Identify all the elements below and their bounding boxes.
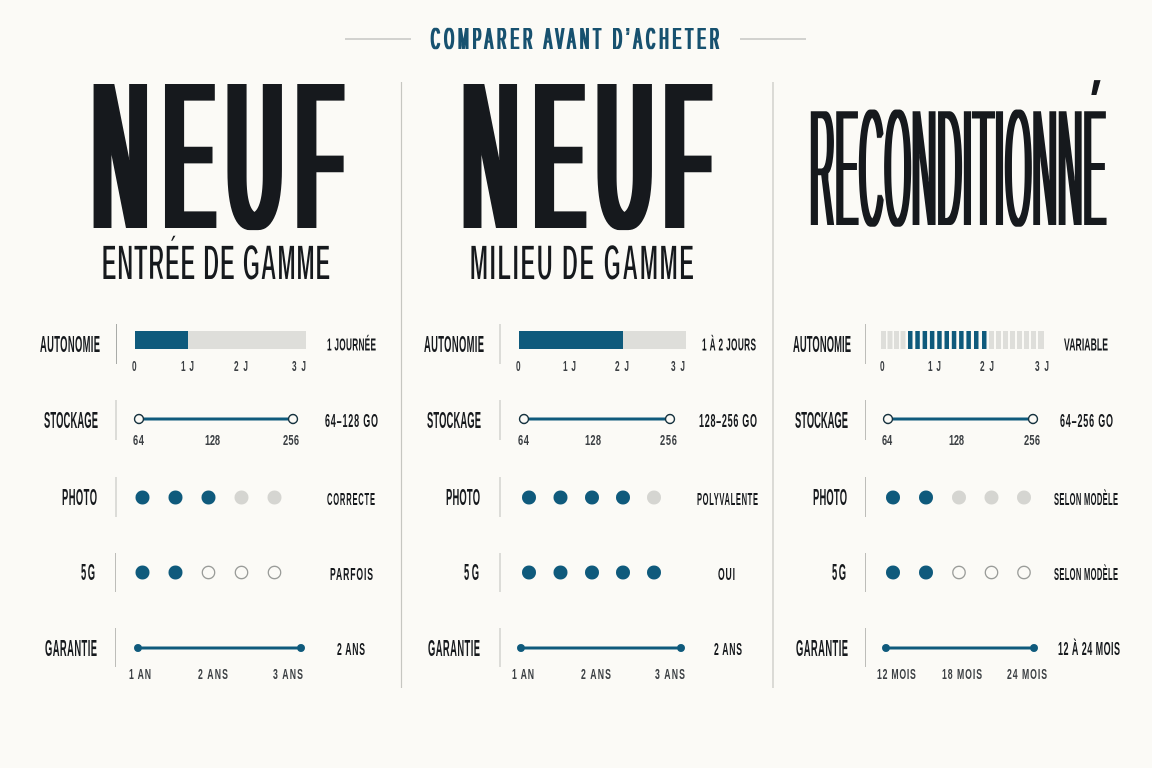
row: stockage	[427, 400, 757, 449]
row: 5G: SELON MODÈLE	[1054, 563, 1118, 584]
row: garantie: 1 AN	[512, 666, 534, 683]
row: autonomie: AUTONOMIE	[40, 331, 100, 357]
title: COMPARER AVANT D’ACHETER	[431, 21, 719, 56]
row: garantie: 3 ANS	[273, 666, 303, 683]
row: stockage: 256	[1024, 432, 1040, 449]
row: stockage: 64	[518, 432, 529, 449]
row: garantie	[796, 628, 1120, 683]
row: autonomie: 1 J	[181, 357, 194, 375]
row: photo: PHOTO	[446, 484, 480, 510]
row: autonomie: 3 J	[671, 357, 685, 375]
row: photo: PHOTO	[813, 484, 847, 510]
row: stockage	[795, 400, 1113, 449]
row: garantie: 18 MOIS	[942, 666, 982, 683]
row: autonomie: VARIABLE	[1064, 334, 1108, 354]
row: autonomie: 0	[516, 357, 521, 375]
row: 5G: 5G	[832, 559, 846, 585]
row: autonomie: 1 JOURNÉE	[327, 334, 376, 354]
row: autonomie: 2 J	[615, 357, 629, 375]
panel: neuf milieu de gamme	[424, 33, 758, 683]
row: stockage: 64–256 GO	[1060, 412, 1113, 432]
row: garantie: 2 ANS	[337, 638, 365, 659]
row: garantie: GARANTIE	[796, 635, 848, 661]
row: 5G: OUI	[718, 563, 735, 584]
row: photo: PHOTO	[62, 484, 97, 510]
subheading: entrée de gamme: ENTRÉE DE GAMME	[102, 234, 330, 292]
row: photo: POLYVALENTE	[697, 489, 758, 509]
row: 5G	[81, 553, 373, 592]
row: stockage: 64	[882, 432, 892, 449]
row: stockage: STOCKAGE	[427, 407, 481, 433]
row: garantie: GARANTIE	[428, 635, 480, 661]
row: 5G	[464, 553, 735, 592]
subheading: milieu de gamme: MILIEU DE GAMME	[470, 236, 694, 292]
row: autonomie: 0	[880, 357, 885, 375]
row: photo: CORRECTE	[327, 489, 375, 509]
row: stockage: 256	[660, 432, 677, 449]
row: autonomie	[424, 324, 756, 375]
heading: neuf: NEUF	[462, 33, 711, 280]
row: stockage: 128	[205, 432, 220, 449]
row: 5G: 5G	[81, 559, 95, 585]
row: garantie: 2 ANS	[198, 666, 228, 683]
row: 5G	[832, 553, 1118, 592]
panel: neuf entrée de gamme	[40, 33, 378, 683]
row: autonomie: 0	[132, 357, 137, 375]
row: photo	[813, 477, 1118, 517]
row: garantie: 2 ANS	[581, 666, 611, 683]
row: stockage: 128	[585, 432, 601, 449]
row: autonomie	[40, 324, 376, 375]
row: autonomie: 2 J	[980, 357, 994, 375]
row: autonomie: AUTONOMIE	[424, 331, 484, 357]
row: autonomie: 1 J	[563, 357, 576, 375]
row: photo	[446, 477, 758, 517]
row: stockage: STOCKAGE	[795, 407, 848, 433]
row: stockage: 128–256 GO	[699, 412, 757, 432]
row: autonomie: 1 À 2 JOURS	[702, 334, 756, 354]
row: autonomie	[793, 324, 1108, 375]
row: garantie: 2 ANS	[714, 638, 742, 659]
row: stockage: 256	[283, 432, 299, 449]
row: stockage: 128	[949, 432, 964, 449]
row: autonomie: 3 J	[292, 357, 306, 375]
row: autonomie: AUTONOMIE	[793, 331, 851, 357]
row: 5G: 5G	[464, 559, 479, 585]
row: garantie: 1 AN	[129, 666, 151, 683]
row: stockage: 64–128 GO	[325, 412, 378, 432]
row: garantie	[45, 628, 365, 683]
row: photo: SELON MODÈLE	[1054, 488, 1118, 509]
row: garantie: 24 MOIS	[1007, 666, 1047, 683]
row: garantie: GARANTIE	[45, 635, 97, 661]
row: stockage: STOCKAGE	[44, 407, 98, 433]
row: stockage: 64	[133, 432, 144, 449]
row: garantie: 3 ANS	[655, 666, 685, 683]
row: stockage	[44, 400, 378, 449]
row: garantie	[428, 628, 742, 683]
row: garantie: 12 À 24 MOIS	[1058, 639, 1120, 660]
row: autonomie: 2 J	[234, 357, 248, 375]
row: autonomie: 1 J	[928, 357, 941, 375]
heading: neuf: NEUF	[92, 33, 343, 280]
panel: reconditionné	[793, 71, 1120, 683]
heading: reconditionné: RECONDITIONNÉ	[810, 71, 1106, 265]
row: 5G: PARFOIS	[330, 563, 373, 584]
row: autonomie: 3 J	[1035, 357, 1049, 375]
row: garantie: 12 MOIS	[877, 666, 916, 683]
row: photo	[62, 477, 375, 517]
